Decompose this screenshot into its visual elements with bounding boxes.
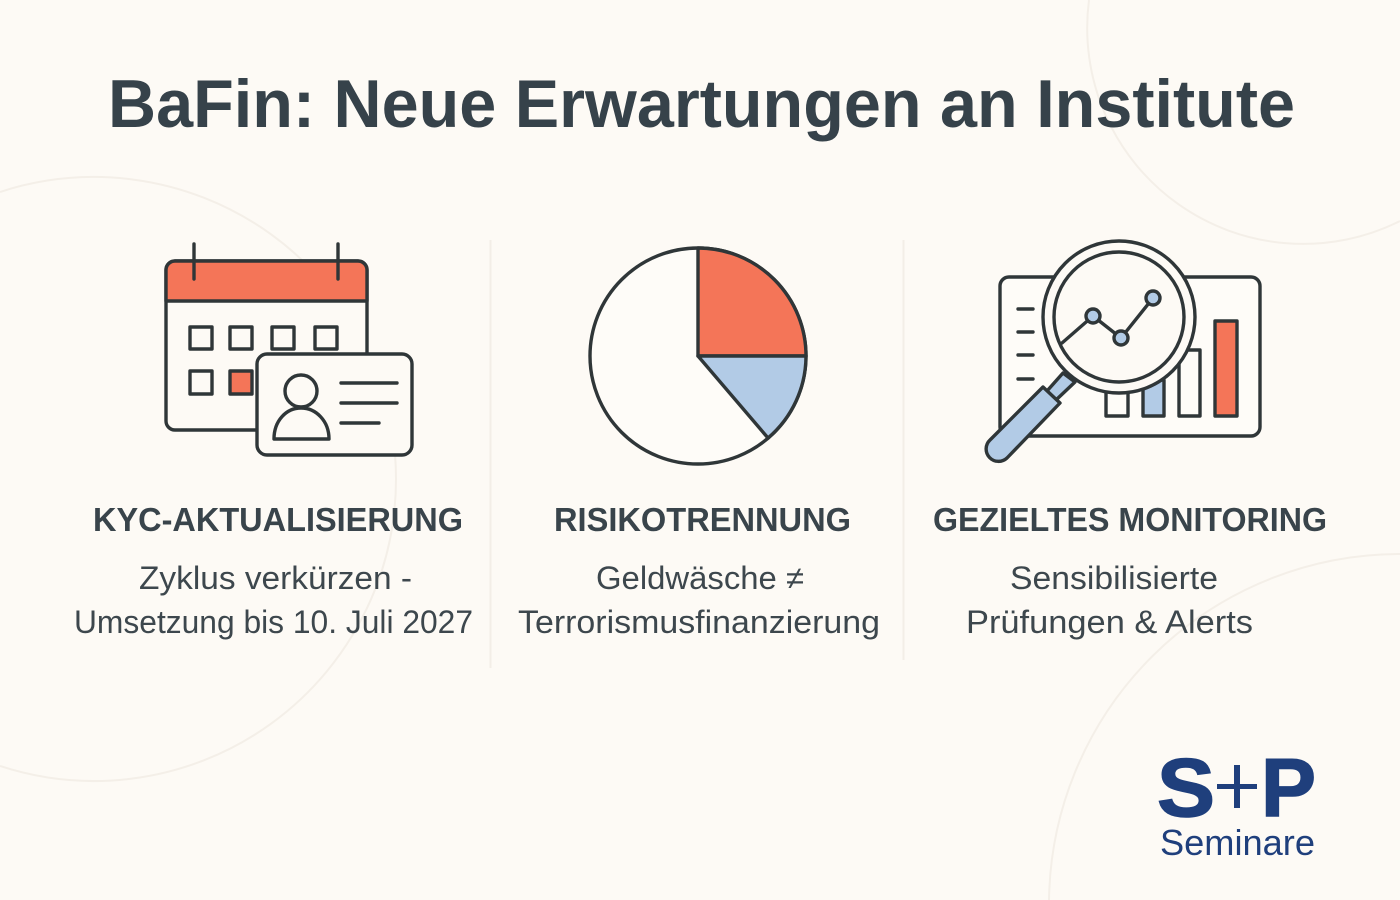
chart: pie chart <box>590 248 806 464</box>
panel: Gezieltes Monitoring <box>933 241 1327 640</box>
text: Monitoring description <box>966 560 1253 640</box>
logo: S+P Seminare <box>1157 741 1316 863</box>
logo: S+P Seminare: P <box>1261 741 1316 834</box>
title: BaFin: Neue Erwartungen an Institute <box>108 66 1295 142</box>
text: Risikotrennung description: Terrorismusfinanzierung <box>518 604 880 640</box>
heading: KYC-Aktualisierung: KYC-AKTUALISIERUNG <box>93 501 463 538</box>
icon: magnifier over dashboard <box>986 241 1260 461</box>
heading: Risikotrennung: RISIKOTRENNUNG <box>554 501 851 538</box>
panel: Risikotrennung <box>518 248 880 640</box>
panel: KYC-Aktualisierung <box>74 244 473 640</box>
heading: Gezieltes Monitoring: GEZIELTES MONITORING <box>933 501 1327 538</box>
text: KYC description <box>74 560 473 640</box>
text: Risikotrennung description <box>518 560 880 640</box>
text: Monitoring description: Sensibilisierte <box>1010 560 1218 596</box>
logo: S+P Seminare: S <box>1157 741 1215 834</box>
logo: S+P Seminare: Seminare <box>1160 822 1315 863</box>
icon: calendar with ID card <box>166 244 412 455</box>
text: Monitoring description: Prüfungen & Alerts <box>966 604 1253 640</box>
text: KYC description: Zyklus verkürzen - <box>139 560 412 596</box>
text: KYC description: Umsetzung bis 10. Juli 2027 <box>74 604 473 640</box>
text: Risikotrennung description: Geldwäsche ≠ <box>596 560 804 596</box>
